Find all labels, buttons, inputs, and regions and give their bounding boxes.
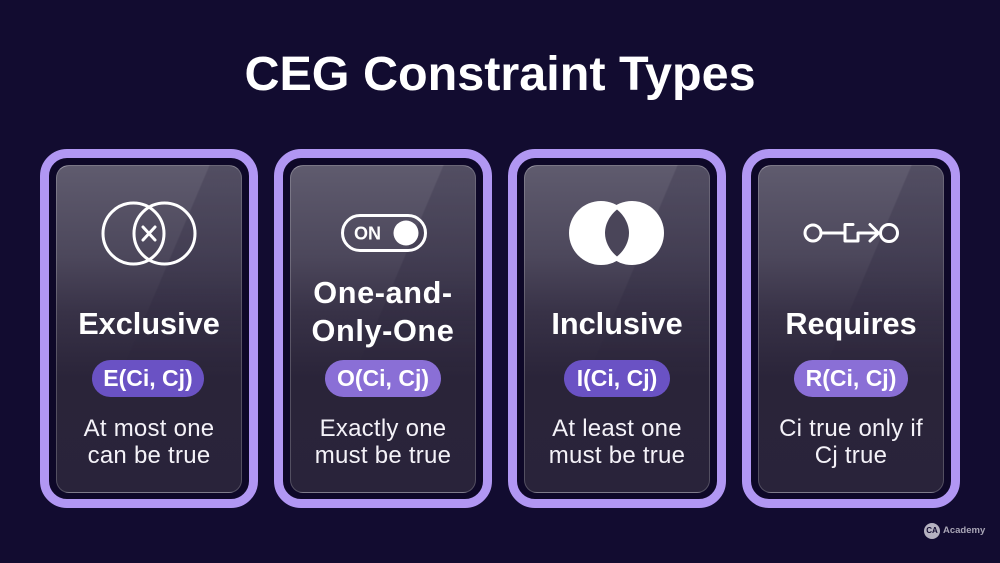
badge: O(Ci, Cj): O(Ci, Cj) [337, 365, 429, 391]
badge: E(Ci, Cj) [92, 360, 204, 397]
description: Ci true only if [779, 415, 923, 442]
brand logo [924, 523, 986, 539]
heading: Inclusive: Inclusive [551, 306, 683, 341]
description [779, 415, 923, 469]
heading: One-and-Only-One: One-and- [313, 275, 453, 310]
icon: overlapping circles with x [102, 202, 196, 266]
description [315, 415, 451, 469]
badge: I(Ci, Cj): I(Ci, Cj) [577, 365, 657, 391]
description: At least one [552, 415, 682, 442]
panel: Exclusive [40, 149, 258, 508]
title: CEG Constraint Types [244, 47, 756, 101]
description: At most one [84, 415, 214, 442]
description [84, 415, 214, 469]
panel: Inclusive [508, 149, 726, 508]
panel: One-and-Only-One [274, 149, 492, 508]
brand logo: Academy [943, 525, 985, 536]
icon: requires connector [804, 222, 899, 243]
panel: Requires [742, 149, 960, 508]
heading: One-and-Only-One [312, 275, 454, 348]
brand logo: CA [926, 526, 938, 535]
badge: O(Ci, Cj) [325, 360, 441, 397]
icon: filled overlapping circles [569, 201, 664, 265]
badge: R(Ci, Cj): R(Ci, Cj) [806, 365, 896, 391]
icon: on toggle: ON [354, 224, 381, 244]
description: Exactly one [320, 415, 446, 442]
description [549, 415, 685, 469]
heading: Exclusive: Exclusive [78, 306, 220, 341]
description: must be true [549, 442, 685, 469]
badge: I(Ci, Cj) [564, 360, 670, 397]
badge: E(Ci, Cj): E(Ci, Cj) [103, 365, 193, 391]
heading: Requires: Requires [785, 306, 917, 341]
description: Cj true [815, 442, 887, 469]
heading: One-and-Only-One: Only-One [312, 313, 454, 348]
icon: on toggle [341, 214, 427, 252]
description: must be true [315, 442, 451, 469]
badge: R(Ci, Cj) [794, 360, 908, 397]
description: can be true [88, 442, 210, 469]
